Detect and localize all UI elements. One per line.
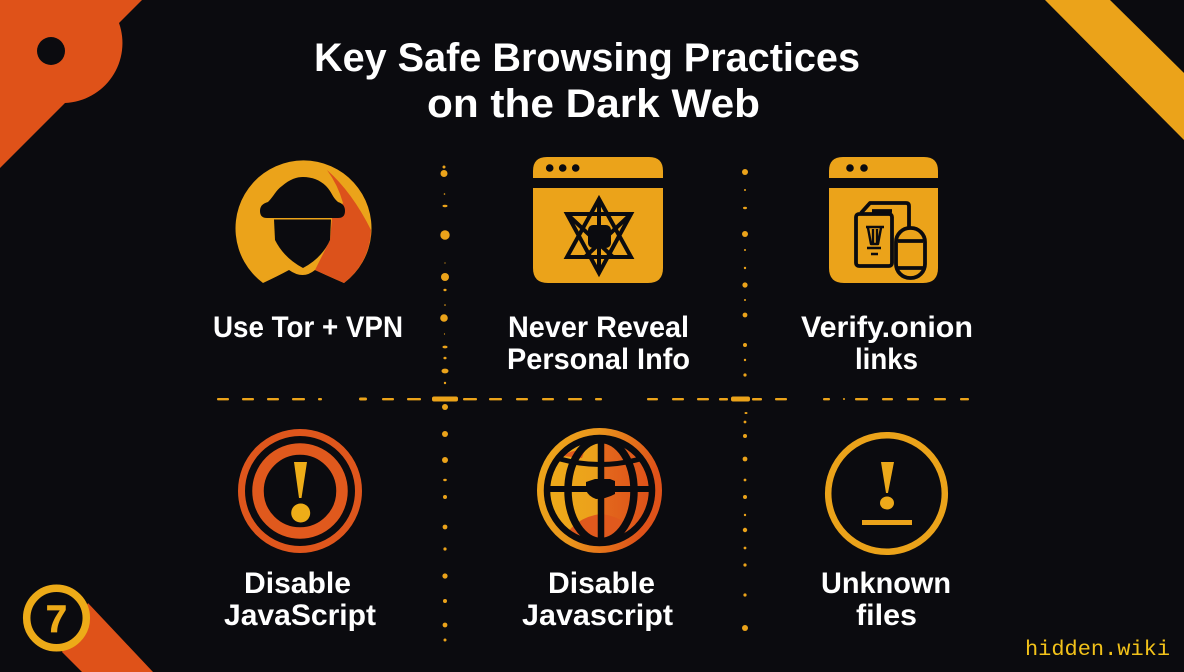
panel: unknown files bbox=[821, 435, 951, 632]
badge: number 7: 7 bbox=[46, 599, 67, 641]
title: Key Safe Browsing Practices bbox=[314, 36, 860, 80]
label: Never Reveal bbox=[508, 311, 689, 344]
label bbox=[522, 567, 673, 632]
panel: disable Javascript globe bbox=[522, 432, 673, 632]
icon: hooded user bbox=[236, 160, 372, 283]
label: Unknown bbox=[821, 567, 951, 600]
panel: disable JavaScript bbox=[224, 432, 376, 632]
panel: verify .onion links bbox=[801, 157, 973, 376]
label bbox=[507, 311, 690, 376]
label: Javascript bbox=[522, 599, 673, 632]
corner decoration: top-right yellow band bbox=[1045, 0, 1184, 140]
icon: browser window with devices bbox=[829, 157, 938, 283]
label: Personal Info bbox=[507, 343, 690, 376]
title bbox=[314, 36, 860, 126]
label bbox=[821, 567, 951, 632]
label bbox=[224, 567, 376, 632]
title: on the Dark Web bbox=[427, 82, 760, 126]
badge: number 7 bbox=[27, 588, 86, 648]
icon: browser window with star bbox=[533, 157, 663, 283]
panel: use Tor + VPN bbox=[213, 160, 403, 344]
dotted divider: vertical left bbox=[440, 166, 450, 642]
label bbox=[801, 311, 973, 376]
label: Disable bbox=[548, 567, 655, 600]
corner decoration: bottom-left orange band bbox=[62, 603, 153, 672]
watermark: hidden.wiki bbox=[1025, 639, 1170, 662]
label: Use Tor + VPN bbox=[213, 311, 403, 344]
dashed divider: horizontal bbox=[217, 396, 969, 402]
label: Disable bbox=[244, 567, 351, 600]
icon: warning circle with underline bbox=[828, 435, 945, 552]
corner decoration: top-left orange shape bbox=[0, 0, 142, 168]
icon: warning concentric rings bbox=[242, 432, 358, 550]
label: files bbox=[856, 599, 917, 632]
label: links bbox=[855, 343, 918, 376]
label: JavaScript bbox=[224, 599, 376, 632]
icon: globe bbox=[540, 432, 658, 550]
dotted divider: vertical right bbox=[742, 169, 748, 631]
panel: never reveal personal info bbox=[507, 157, 690, 376]
label: Verify.onion bbox=[801, 311, 973, 344]
